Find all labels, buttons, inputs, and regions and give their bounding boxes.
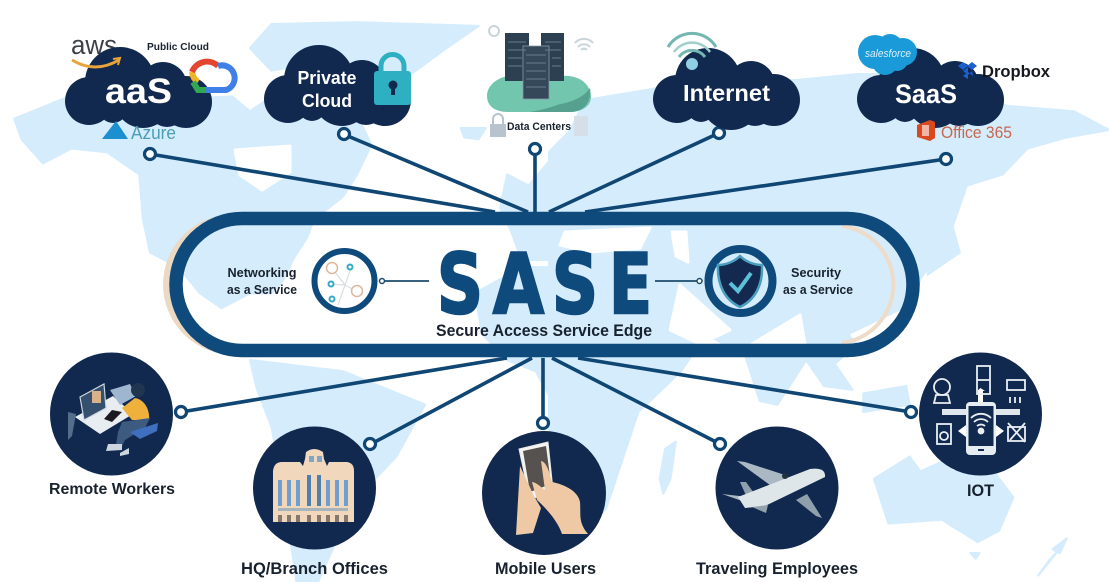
SASE title: E — [609, 236, 652, 333]
aaS cloud shape — [65, 47, 212, 128]
building circle icon — [253, 426, 376, 550]
panel: SaaS — [857, 34, 1051, 142]
subtitle: Secure Access Service Edge — [436, 322, 652, 340]
networking label: as a Service — [227, 282, 297, 297]
panel: aaS public cloud — [65, 30, 235, 143]
SASE title: A — [493, 236, 544, 333]
networking label — [227, 265, 297, 297]
mobile users label: Mobile Users — [495, 560, 596, 578]
SaaS label: SaaS — [895, 79, 957, 109]
traveling employees label: Traveling Employees — [696, 560, 858, 578]
panel: remote workers — [49, 352, 175, 498]
aaS label: aaS — [105, 72, 172, 111]
panel: data centers — [487, 26, 593, 137]
google cloud logo — [192, 62, 235, 90]
panel: private cloud — [264, 45, 411, 126]
private cloud label: Cloud — [302, 91, 352, 111]
azure logo: Azure — [131, 123, 176, 143]
salesforce logo — [858, 34, 917, 75]
internet cloud shape — [653, 48, 800, 130]
azure logo — [102, 121, 176, 143]
panel: mobile users — [482, 431, 606, 578]
internet label: Internet — [683, 80, 770, 106]
icon: faded gear and wifi — [489, 26, 593, 50]
networking label: Networking — [228, 265, 297, 280]
connector lines: bottom — [176, 358, 916, 450]
remote workers circle icon — [50, 352, 173, 476]
panel: IoT — [919, 352, 1042, 500]
connector lines: top — [144, 128, 952, 212]
panel: HQ branch offices — [241, 426, 388, 578]
IoT devices circle icon — [919, 352, 1042, 476]
dropbox logo: Dropbox — [982, 62, 1051, 81]
security label — [783, 265, 853, 297]
icon: networking circle — [314, 251, 374, 311]
pill beige accent left — [167, 218, 233, 350]
panel: internet — [653, 33, 800, 130]
icon: security shield — [708, 249, 772, 313]
connector: SASE to security — [655, 278, 702, 284]
icon: grey locks — [490, 114, 588, 137]
private cloud label: Private — [298, 68, 356, 88]
icon: padlock — [374, 54, 411, 105]
map ocean details — [235, 146, 905, 344]
aws smile — [72, 58, 120, 67]
pill beige accent right — [842, 226, 893, 343]
SASE title — [437, 236, 652, 333]
connector: networking to SASE — [380, 278, 429, 284]
private cloud shape — [264, 45, 411, 126]
teal cloud base — [487, 75, 591, 112]
IoT label: IOT — [967, 482, 994, 500]
office 365 logo — [917, 120, 1012, 142]
security label: as a Service — [783, 282, 853, 297]
private cloud label — [298, 68, 356, 111]
airplane circle icon — [716, 426, 838, 550]
HQ label: HQ/Branch Offices — [241, 560, 388, 578]
remote workers label: Remote Workers — [49, 481, 175, 498]
public cloud label: Public Cloud — [147, 41, 209, 53]
SASE title: S — [552, 236, 598, 333]
panel: SASE central pill — [167, 218, 913, 350]
server racks — [505, 33, 564, 99]
SaaS cloud shape — [857, 48, 1004, 128]
security label: Security — [791, 265, 842, 280]
office 365 logo: Office 365 — [941, 123, 1012, 142]
panel: traveling employees — [696, 426, 858, 578]
data centers label: Data Centers — [507, 121, 571, 133]
aws wordmark: aws — [71, 30, 117, 60]
SASE title: S — [437, 236, 483, 333]
hand and phone circle icon — [482, 431, 606, 555]
icon: wifi — [668, 33, 716, 70]
pill outline — [176, 218, 913, 350]
salesforce logo: salesforce — [865, 48, 911, 60]
